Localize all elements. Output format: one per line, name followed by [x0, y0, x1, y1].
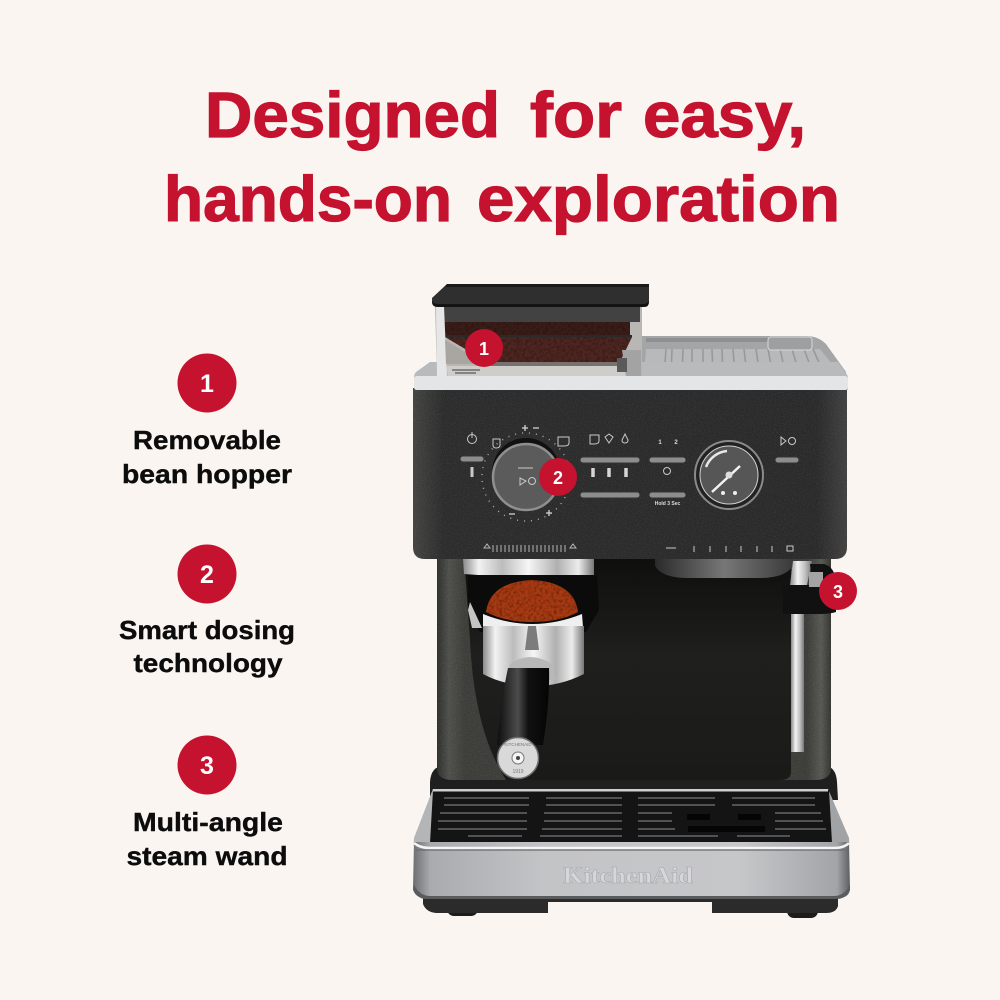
- feature 1: removable bean hopper: 1: [200, 370, 214, 398]
- machine feet and underside: [423, 892, 838, 918]
- grate slots: [438, 798, 826, 836]
- title: hands-on: [164, 163, 452, 235]
- espresso machine: [413, 284, 857, 918]
- selector buttons and icons: [580, 434, 640, 498]
- title: for: [530, 79, 622, 151]
- drip tray base: [413, 766, 850, 899]
- feature 3: multi-angle steam wand: Multi-angle: [133, 807, 283, 837]
- feature 3: multi-angle steam wand: 3: [200, 752, 214, 780]
- panel controls: [460, 425, 799, 552]
- control panel body: [413, 376, 848, 559]
- feature 2: smart dosing technology: Smart dosing: [119, 615, 295, 645]
- bean hopper: [432, 284, 649, 377]
- feature 1: removable bean hopper: [122, 354, 292, 489]
- marker 1 on hopper: 1: [479, 339, 489, 359]
- shot buttons: 1: [658, 440, 662, 446]
- top cup warmer tray: [640, 336, 846, 380]
- marker 3 on steam wand: [819, 572, 857, 610]
- shot buttons: Hold 3 Sec: [655, 501, 680, 507]
- portafilter with ground coffee: [468, 575, 599, 778]
- portafilter with ground coffee: KITCHENAID: [504, 742, 532, 747]
- feature 1: removable bean hopper: Removable: [133, 425, 281, 455]
- title: [164, 79, 840, 235]
- brand name on tray: KitchenAid: [563, 863, 693, 888]
- title: easy,: [643, 79, 806, 151]
- marker 2 on dial: [539, 458, 577, 496]
- feature 3: multi-angle steam wand: steam wand: [126, 841, 288, 871]
- title: exploration: [477, 163, 840, 235]
- title: Designed: [205, 79, 500, 151]
- machine lower body: [437, 555, 831, 780]
- feature 2: smart dosing technology: technology: [134, 648, 283, 678]
- portafilter with ground coffee: 1919: [512, 769, 524, 775]
- dose dial: [482, 425, 570, 521]
- start button: [775, 437, 799, 463]
- lock icon: [787, 546, 793, 551]
- feature 1: removable bean hopper: bean hopper: [122, 459, 292, 489]
- shot buttons: [649, 440, 686, 507]
- steam scale: [666, 546, 772, 552]
- feature 3: multi-angle steam wand: [126, 736, 288, 871]
- feature 2: smart dosing technology: 2: [200, 561, 214, 589]
- pressure gauge: [695, 441, 763, 509]
- marker 1 on hopper: [465, 329, 503, 367]
- feature 2: smart dosing technology: [119, 544, 295, 678]
- top silver band: [414, 362, 848, 390]
- power button: [460, 432, 484, 477]
- marker 3 on steam wand: 3: [833, 582, 843, 602]
- shot buttons: 2: [674, 440, 678, 446]
- marker 2 on dial: 2: [553, 468, 563, 488]
- group head and steam nozzle: [463, 559, 793, 582]
- steam wand: [783, 561, 836, 752]
- grind scale: [484, 544, 576, 552]
